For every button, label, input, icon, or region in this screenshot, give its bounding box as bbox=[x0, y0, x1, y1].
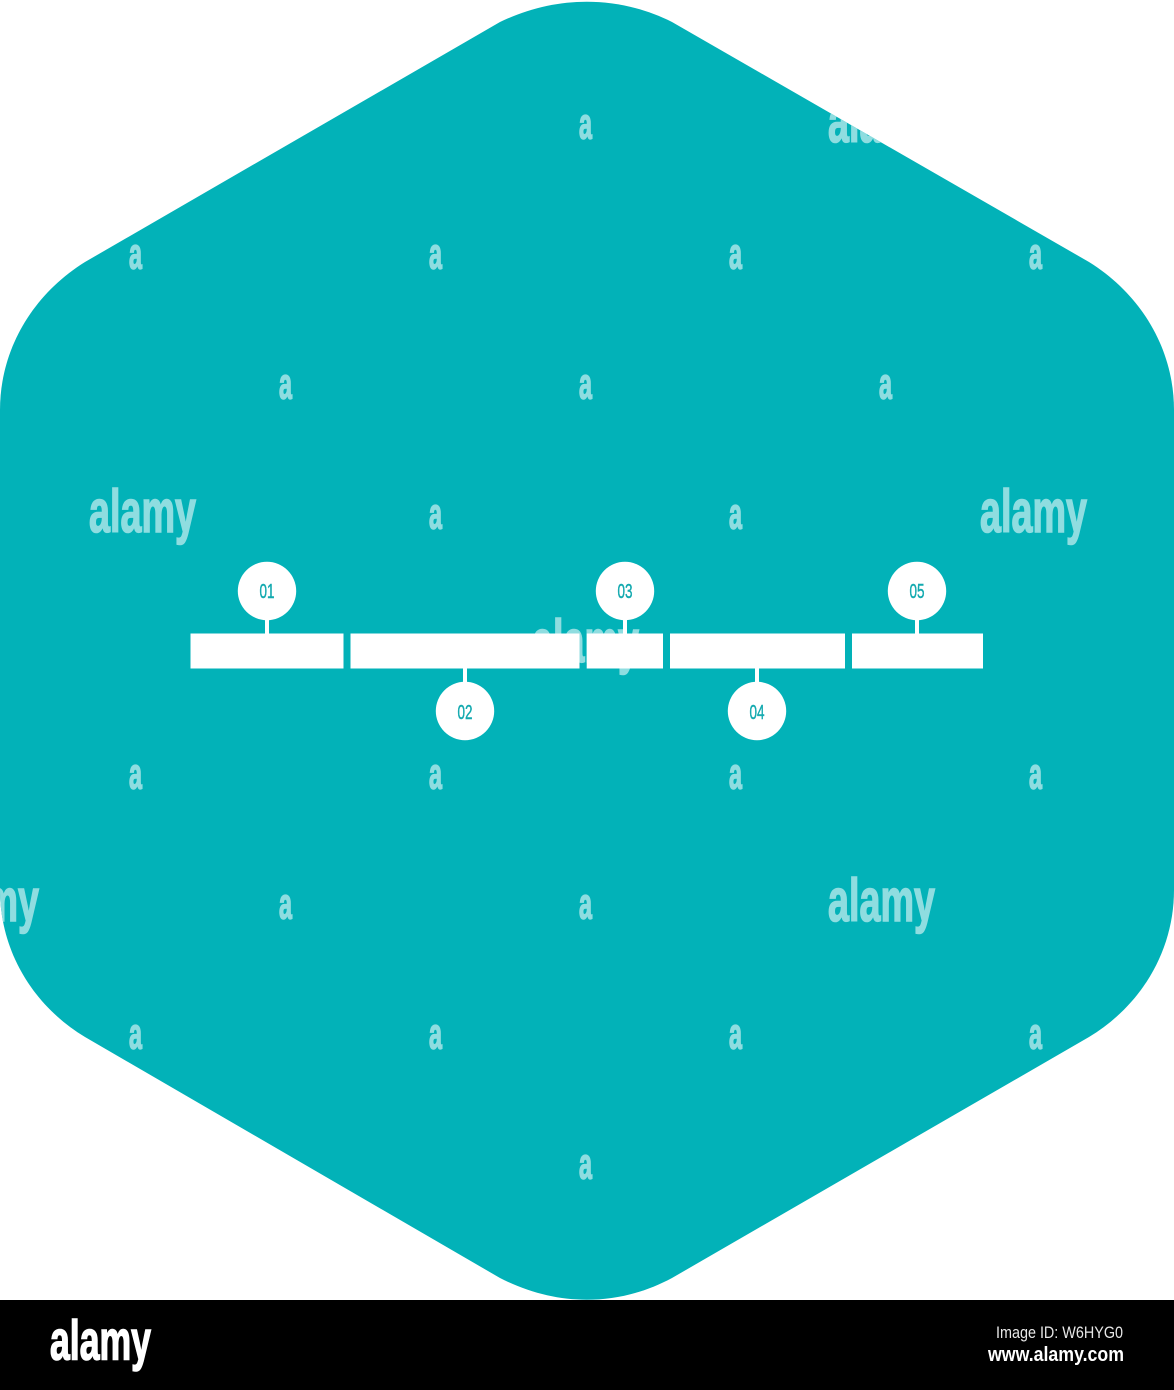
watermark pattern: a bbox=[279, 360, 292, 408]
watermark pattern: a bbox=[729, 230, 742, 278]
watermark pattern: a bbox=[279, 880, 292, 928]
watermark pattern: a bbox=[579, 880, 592, 928]
segment 4 with marker 04: 04 bbox=[750, 702, 764, 724]
watermark pattern bbox=[0, 88, 1087, 1188]
segment 4 with marker 04 bbox=[670, 634, 845, 740]
watermark pattern: a bbox=[579, 1140, 592, 1188]
segment 5 with marker 05 bbox=[852, 562, 983, 668]
segment 2 with marker 02: 02 bbox=[458, 702, 472, 724]
watermark pattern: a bbox=[879, 360, 892, 408]
watermark pattern: a bbox=[729, 1010, 742, 1058]
footer bar bbox=[0, 1300, 1174, 1390]
watermark pattern: a bbox=[129, 1010, 142, 1058]
watermark pattern: a bbox=[729, 750, 742, 798]
watermark pattern: a bbox=[729, 490, 742, 538]
timeline bbox=[190, 562, 983, 740]
image id: Image ID: W6HYG0 bbox=[996, 1323, 1123, 1342]
segment 2 with marker 02 bbox=[350, 634, 580, 740]
watermark pattern: a bbox=[429, 490, 442, 538]
website: www.alamy.com bbox=[987, 1344, 1124, 1366]
watermark pattern: a bbox=[1029, 750, 1042, 798]
watermark pattern: a bbox=[129, 750, 142, 798]
watermark pattern: alamy bbox=[828, 88, 935, 155]
segment 1 with marker 01 bbox=[190, 562, 344, 668]
watermark pattern: a bbox=[129, 230, 142, 278]
segment 5 with marker 05: 05 bbox=[910, 581, 924, 603]
watermark pattern: a bbox=[429, 1010, 442, 1058]
watermark pattern: a bbox=[429, 750, 442, 798]
segment 3 with marker 03: 03 bbox=[618, 581, 632, 603]
watermark pattern: a bbox=[429, 230, 442, 278]
footer logo: alamy bbox=[50, 1308, 151, 1372]
watermark pattern: a bbox=[1029, 1010, 1042, 1058]
watermark pattern: a bbox=[579, 360, 592, 408]
watermark pattern: alamy bbox=[532, 608, 639, 675]
segment 3 with marker 03 bbox=[587, 562, 663, 668]
watermark pattern: alamy bbox=[980, 478, 1087, 545]
watermark pattern: alamy bbox=[828, 867, 935, 934]
watermark pattern: a bbox=[1029, 230, 1042, 278]
segment 1 with marker 01: 01 bbox=[260, 581, 274, 603]
watermark pattern: alamy bbox=[89, 478, 196, 545]
watermark pattern: a bbox=[579, 100, 592, 148]
